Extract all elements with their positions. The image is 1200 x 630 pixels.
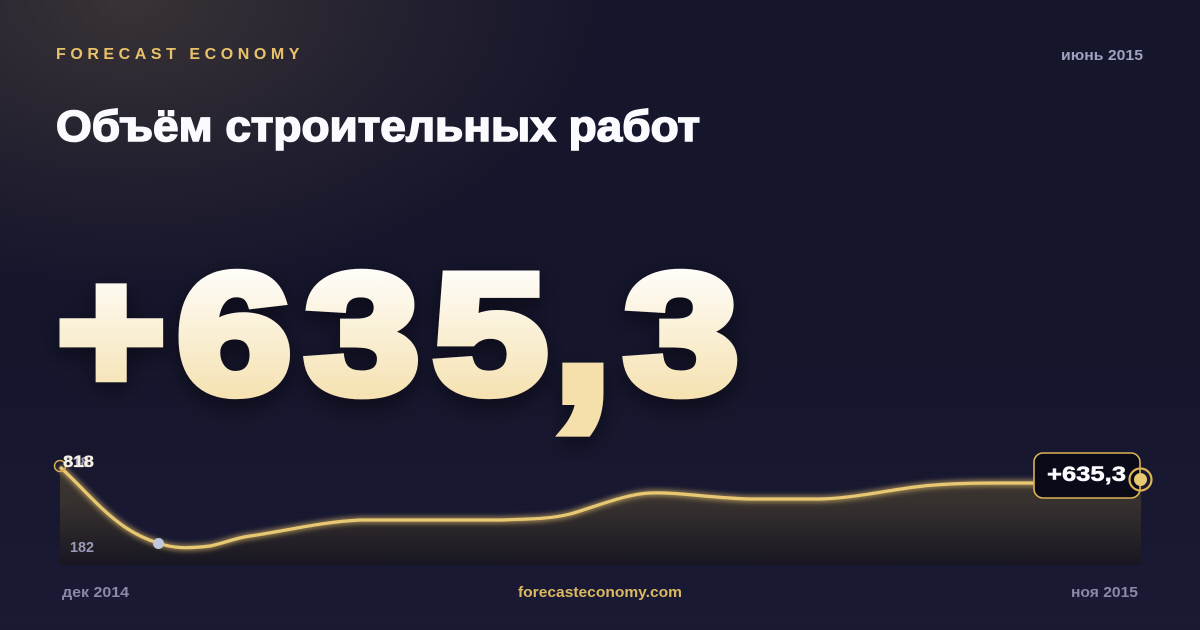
value callout [1034,453,1140,498]
end marker [1130,468,1152,490]
source site: forecasteconomy.com [518,584,682,601]
value callout: +635,3 [1047,462,1126,486]
big number: , [554,216,611,443]
end date: ноя 2015 [1071,584,1138,601]
big number: 635 [177,238,547,429]
min marker [153,538,164,549]
brand label: FORECAST ECONOMY [56,46,304,63]
max label: 818 [64,454,89,471]
min label: 182 [70,540,94,556]
max label: 818 [63,452,94,471]
line chart [54,452,1152,565]
big number: + [57,234,165,429]
title: Объём строительных работ [56,102,700,151]
chart area fill [60,467,1141,565]
line [60,467,1141,548]
big number: 3 [624,238,739,429]
start date: дек 2014 [62,584,130,601]
date label: июнь 2015 [1061,47,1143,64]
start marker [54,460,66,472]
big number [57,216,739,443]
line glow [60,467,1141,548]
